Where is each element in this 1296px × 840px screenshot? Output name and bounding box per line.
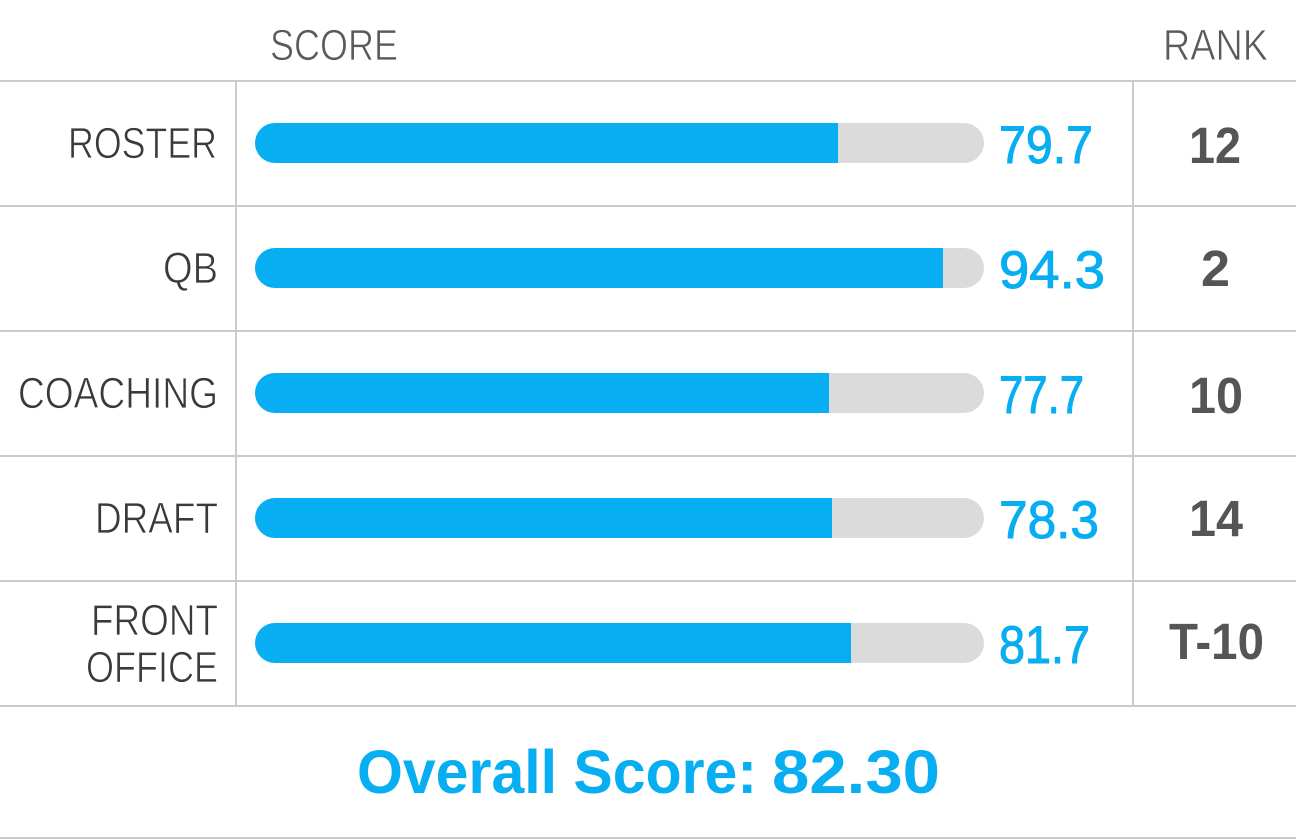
overall score: 82.30 [772, 738, 940, 806]
heading: score column: SCORE [270, 22, 398, 70]
heading: rank column: RANK [1163, 22, 1268, 70]
value: draft score: 78.3 [999, 491, 1099, 550]
rank: front office: T-10 [1169, 613, 1264, 670]
value: coaching score: 77.7 [999, 366, 1084, 425]
label: front office [86, 597, 218, 692]
row: qb [163, 240, 1230, 300]
value: roster score: 79.7 [999, 116, 1093, 175]
row: roster [68, 116, 1241, 175]
row: front office [86, 597, 1264, 692]
label: roster: ROSTER [68, 120, 217, 168]
row: coaching [18, 366, 1243, 425]
bar: qb score [255, 248, 984, 288]
rank: qb: 2 [1201, 240, 1230, 297]
label: qb: QB [163, 245, 218, 293]
bar: front office score [255, 623, 984, 663]
overall score: Overall Score: [357, 738, 757, 806]
rank: draft: 14 [1189, 490, 1244, 547]
row: draft [95, 490, 1244, 550]
rank: coaching: 10 [1189, 367, 1243, 424]
label: draft: DRAFT [95, 495, 218, 543]
bar: roster score [255, 123, 984, 163]
bar: coaching score [255, 373, 984, 413]
value: front office score: 81.7 [999, 616, 1090, 675]
label: coaching: COACHING [18, 370, 218, 418]
rank: roster: 12 [1189, 117, 1241, 174]
value: qb score: 94.3 [999, 241, 1105, 300]
bar: draft score [255, 498, 984, 538]
label: front office: FRONT [91, 597, 218, 645]
label: front office: OFFICE [86, 644, 218, 692]
